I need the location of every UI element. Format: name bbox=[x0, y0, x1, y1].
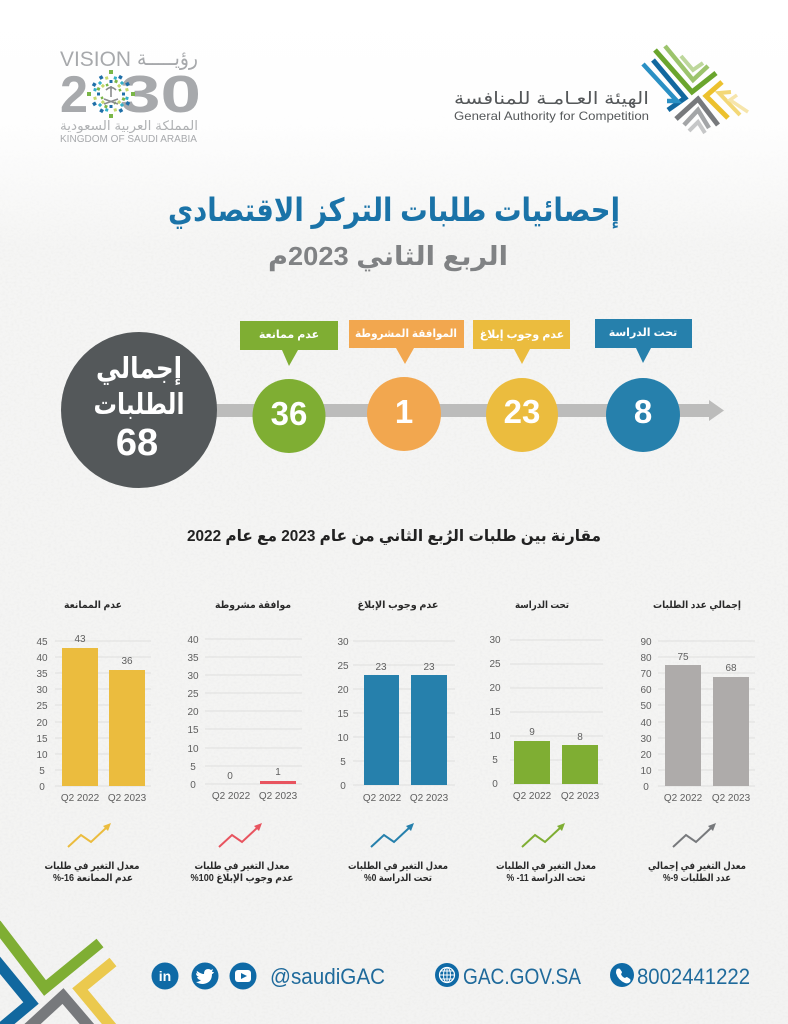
chart title: عدم الممانعة bbox=[64, 600, 122, 611]
change rate note: تحت الدراسة 0% bbox=[364, 873, 432, 884]
change rate note: معدل التغير في الطلبات bbox=[348, 861, 448, 872]
bar chart: 25 bbox=[489, 659, 501, 670]
bar chart: 40 bbox=[187, 635, 199, 646]
bar chart: 1 bbox=[275, 767, 281, 778]
authority mark bbox=[643, 46, 748, 133]
change rate note: معدل التغير في إجمالي bbox=[648, 861, 746, 872]
bar chart: 68 bbox=[725, 663, 737, 674]
circle: 23 bbox=[486, 378, 558, 452]
bar chart: 50 bbox=[640, 701, 652, 712]
logo: Vision 2030 bbox=[60, 47, 201, 145]
bar chart: 20 bbox=[489, 683, 501, 694]
chart panel: conditional approval bbox=[187, 600, 302, 884]
bar chart: 23 bbox=[423, 662, 435, 673]
circle: 8: 8 bbox=[634, 393, 652, 430]
phone number: 8002441222 bbox=[637, 964, 750, 989]
bar chart: Q2 2023 bbox=[410, 793, 449, 804]
bar chart: 15 bbox=[337, 709, 349, 720]
bar chart: 5 bbox=[39, 766, 45, 777]
bar chart bbox=[337, 637, 455, 804]
bar chart: Q2 2022 bbox=[212, 791, 251, 802]
change rate note: عدد الطلبات 9-% bbox=[663, 873, 731, 884]
bar chart: 40 bbox=[36, 653, 48, 664]
bar chart: 0 bbox=[190, 780, 196, 791]
numeral 30: 30 bbox=[120, 66, 201, 124]
callout: conditional approval: الموافقة المشروطة bbox=[355, 328, 457, 340]
comparison heading: مقارنة بين طلبات الرُبع الثاني من عام 2023 مع عام 2022 bbox=[187, 528, 601, 546]
circle: 8 bbox=[606, 378, 680, 452]
change rate note bbox=[496, 861, 596, 884]
bar chart: Q2 2022 bbox=[664, 793, 703, 804]
icon: twitter bbox=[192, 962, 218, 990]
chart title: تحت الدراسة bbox=[515, 600, 569, 611]
numeral 2: 2 bbox=[60, 66, 88, 124]
bar chart: 35 bbox=[187, 653, 199, 664]
total circle: إجمالي bbox=[96, 353, 182, 386]
circle: 36: 36 bbox=[271, 395, 307, 432]
bar chart: Q2 2023 bbox=[108, 793, 147, 804]
callout: under review bbox=[595, 319, 692, 363]
bar chart: 90 bbox=[640, 637, 652, 648]
bar chart: 30 bbox=[640, 734, 652, 745]
footer contacts bbox=[152, 962, 750, 990]
bar chart: Q2 2023 bbox=[259, 791, 298, 802]
bar chart: 20 bbox=[187, 707, 199, 718]
corner logo mark bbox=[0, 924, 114, 1024]
bar chart: Q2 2022 bbox=[513, 791, 552, 802]
bar chart: 0 bbox=[492, 779, 498, 790]
vision arabic wordmark: رؤيـــــة bbox=[137, 47, 198, 70]
trend arrow bbox=[673, 823, 716, 847]
change rate note bbox=[190, 861, 294, 884]
bar chart: 40 bbox=[640, 718, 652, 729]
bar chart: Q2 2022 bbox=[61, 793, 100, 804]
callout: no notification required: عدم وجوب إبلاغ bbox=[480, 329, 564, 341]
bar chart: 5 bbox=[492, 755, 498, 766]
icon: phone bbox=[610, 963, 634, 987]
bar chart: Q2 2023 bbox=[712, 793, 751, 804]
total circle: 68 bbox=[116, 422, 158, 464]
bar chart: 5 bbox=[340, 757, 346, 768]
bar chart: 43 bbox=[74, 634, 86, 645]
bar chart: 60 bbox=[640, 685, 652, 696]
bar chart: 30 bbox=[489, 635, 501, 646]
chart title: إجمالي عدد الطلبات bbox=[653, 600, 741, 611]
bar chart: 9 bbox=[529, 727, 535, 738]
bar chart: 25 bbox=[187, 689, 199, 700]
bar chart bbox=[187, 635, 302, 802]
bar chart: 10 bbox=[489, 731, 501, 742]
vision wordmark: VISION bbox=[60, 48, 131, 71]
change rate note: معدل التغير في طلبات bbox=[194, 861, 290, 872]
callout: under review: تحت الدراسة bbox=[609, 327, 677, 339]
total circle: الطلبات bbox=[94, 389, 184, 421]
bar chart: 10 bbox=[640, 766, 652, 777]
trend arrow bbox=[371, 823, 414, 847]
bar chart: 0 bbox=[227, 771, 233, 782]
bar chart: 10 bbox=[36, 750, 48, 761]
chart panel: no notification required bbox=[337, 600, 455, 884]
authority arabic name: الهيئة العـامـة للمنافسة bbox=[454, 89, 649, 109]
icon: youtube bbox=[230, 962, 256, 990]
bar chart: 80 bbox=[640, 653, 652, 664]
bar chart: Q2 2022 bbox=[363, 793, 402, 804]
bar chart: 45 bbox=[36, 637, 48, 648]
timeline arrow bbox=[215, 400, 724, 421]
bar chart: 30 bbox=[337, 637, 349, 648]
trend arrow bbox=[68, 823, 111, 847]
bar chart: 35 bbox=[36, 669, 48, 680]
authority english name: General Authority for Competition bbox=[454, 109, 649, 123]
chart title: عدم وجوب الإبلاغ bbox=[358, 600, 438, 611]
chart title: موافقة مشروطة bbox=[215, 600, 291, 611]
icon: linkedin: in bbox=[159, 968, 171, 984]
bar chart: Q2 2023 bbox=[561, 791, 600, 802]
bar chart: 8 bbox=[577, 732, 583, 743]
bar chart: 15 bbox=[187, 725, 199, 736]
change rate note: عدم وجوب الإبلاغ 100% bbox=[190, 873, 294, 884]
bar chart: 10 bbox=[187, 744, 199, 755]
bar chart: 25 bbox=[337, 661, 349, 672]
chart panel: total requests bbox=[640, 600, 755, 884]
kingdom english name: KINGDOM OF SAUDI ARABIA bbox=[60, 134, 197, 145]
change rate note bbox=[648, 861, 746, 884]
title: إحصائيات طلبات التركز الاقتصادي bbox=[168, 192, 620, 230]
change rate note: عدم الممانعة 16-% bbox=[53, 873, 133, 884]
change rate note: تحت الدراسة 11- % bbox=[506, 873, 586, 884]
kingdom arabic name: المملكة العربية السعودية bbox=[60, 118, 198, 134]
change rate note: معدل التغير في طلبات bbox=[44, 861, 140, 872]
change rate note bbox=[348, 861, 448, 884]
chart panel: under review bbox=[489, 600, 603, 884]
bar chart: 20 bbox=[36, 718, 48, 729]
emblem dots bbox=[87, 70, 135, 118]
bar chart: 30 bbox=[36, 685, 48, 696]
bar chart bbox=[36, 634, 151, 804]
bar chart: 25 bbox=[36, 701, 48, 712]
total circle bbox=[61, 332, 217, 488]
callout: no objection bbox=[240, 321, 338, 366]
circle: 36 bbox=[252, 379, 326, 453]
circle: 1: 1 bbox=[395, 393, 413, 430]
bar chart: 0 bbox=[340, 781, 346, 792]
bar chart: 30 bbox=[187, 671, 199, 682]
bar chart: 0 bbox=[39, 782, 45, 793]
bar chart: 15 bbox=[489, 707, 501, 718]
trend arrow bbox=[522, 823, 565, 847]
bar chart: 10 bbox=[337, 733, 349, 744]
icon: linkedin bbox=[152, 962, 178, 990]
logo: General Authority for Competition bbox=[454, 46, 748, 133]
callout: conditional approval bbox=[349, 320, 464, 364]
chart panel: no objection bbox=[36, 600, 151, 884]
bar chart: 0 bbox=[643, 782, 649, 793]
change rate note: معدل التغير في الطلبات bbox=[496, 861, 596, 872]
bar chart bbox=[489, 635, 603, 802]
circle: 23: 23 bbox=[504, 393, 540, 430]
callout: no objection: عدم ممانعة bbox=[259, 329, 319, 341]
timeline bbox=[61, 319, 724, 488]
bar chart: 75 bbox=[677, 652, 689, 663]
bar chart bbox=[640, 637, 755, 804]
website: GAC.GOV.SA bbox=[463, 964, 581, 989]
bar chart: 20 bbox=[640, 750, 652, 761]
callout: no notification required bbox=[473, 320, 570, 364]
bar chart: 23 bbox=[375, 662, 387, 673]
bar chart: 15 bbox=[36, 734, 48, 745]
bar chart: 36 bbox=[121, 656, 133, 667]
social handle: @saudiGAC bbox=[270, 964, 385, 989]
change rate note bbox=[44, 861, 140, 884]
circle: 1 bbox=[367, 377, 441, 451]
bar chart: 20 bbox=[337, 685, 349, 696]
subtitle: الربع الثاني 2023م bbox=[268, 241, 508, 272]
icon: globe bbox=[435, 963, 459, 987]
bar chart: 70 bbox=[640, 669, 652, 680]
bar chart: 5 bbox=[190, 762, 196, 773]
trend arrow bbox=[219, 823, 262, 847]
